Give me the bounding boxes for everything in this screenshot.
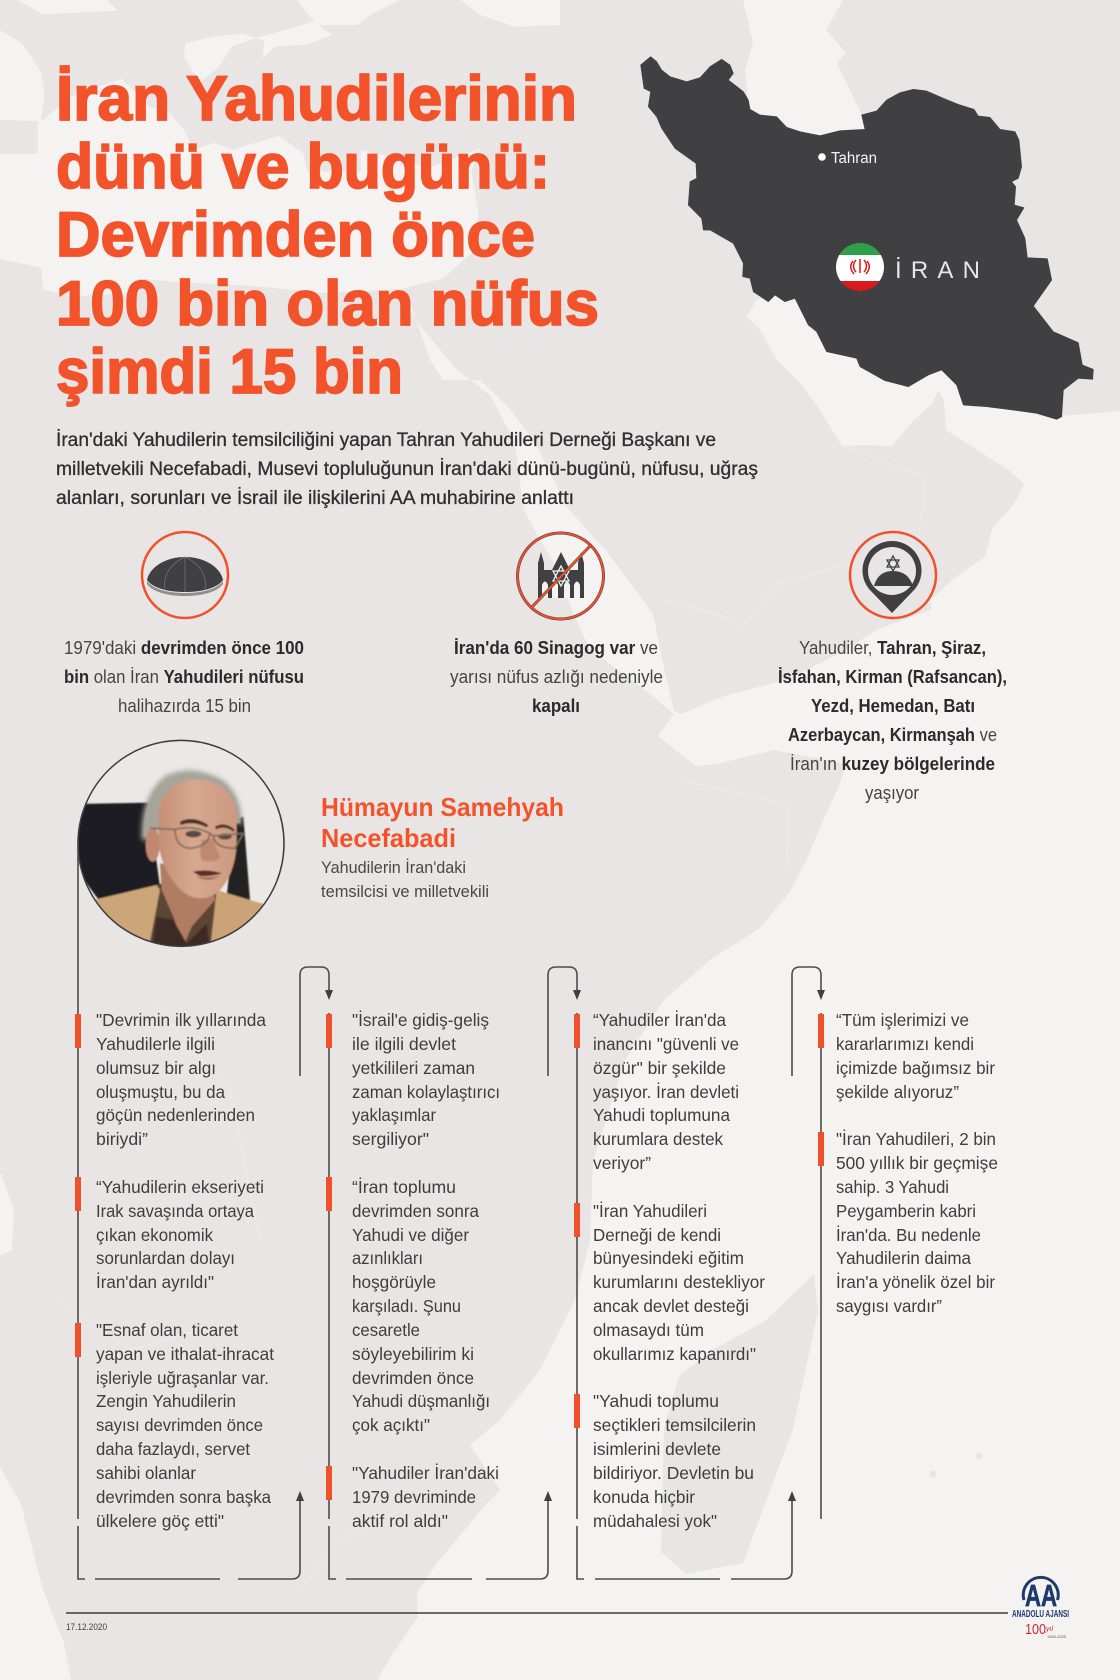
quote 5: azınlıkları [352,1248,423,1268]
quote 2 [75,1177,264,1292]
quote 11: saygısı vardır” [836,1296,942,1316]
quote 5: çok açıktı" [352,1415,430,1435]
title: Devrimden önce [56,200,535,270]
quote 6 [326,1463,499,1531]
stat text: kapalı [532,696,580,716]
stat text [778,638,1007,803]
quote 6: "Yahudiler İran'daki [352,1463,499,1483]
quote 9: isimlerini devlete [593,1439,721,1459]
quote 1: "Devrimin ilk yıllarında [96,1010,266,1030]
quote 1: oluşmuştu, bu da [96,1082,225,1102]
quote 3 [75,1320,274,1531]
panel: cities stat [778,532,1007,803]
quote 10 [818,1010,995,1102]
quote 3: Zengin Yahudilerin [96,1391,236,1411]
quote 9: konuda hiçbir [593,1487,695,1507]
quote 4: "İsrail'e gidiş-geliş [352,1010,489,1030]
quote 4 [326,1010,500,1149]
quote 11: "İran Yahudileri, 2 bin [836,1129,996,1149]
quote 10: “Tüm işlerimizi ve [836,1010,969,1030]
portrait [77,740,287,950]
quote 9: müdahalesi yok" [593,1511,717,1531]
quote column 2 [326,1010,500,1531]
quote 8 [574,1201,765,1364]
icon: kippah [142,532,228,618]
quote 9: bildiriyor. Devletin bu [593,1463,754,1483]
stat text: Yezd, Hemedan, Batı [811,696,975,716]
panel: synagogue stat [450,533,663,716]
quote 2: İran'dan ayrıldı" [96,1272,214,1292]
quote 3: "Esnaf olan, ticaret [96,1320,238,1340]
quote 7: yaşıyor. İran devleti [593,1082,739,1102]
Anadolu Agency logo: 1920-2020 [1047,1634,1067,1639]
stat text [64,638,304,716]
country label: İRAN [895,257,980,284]
quote 9: "Yahudi toplumu [593,1391,719,1411]
title: dünü ve bugünü: [56,132,550,202]
quote 5: Yahudi ve diğer [352,1225,469,1245]
quote 8: "İran Yahudileri [593,1201,707,1221]
quote 5: Yahudi düşmanlığı [352,1391,490,1411]
stat text: 1979'daki devrimden önce 100 [64,638,304,658]
intro text: milletvekili Necefabadi, Musevi topluluğunun İran'daki dünü-bugünü, nüfusu, uğraş [56,459,758,480]
intro text [56,430,758,509]
quote 3: sahibi olanlar [96,1463,196,1483]
quote 5: devrimden sonra [352,1201,479,1221]
quote 9 [574,1391,756,1531]
quote 2: Irak savaşında ortaya [96,1201,254,1221]
quote column 1 [75,1010,274,1531]
quote 10: içimizde bağımsız bir [836,1058,995,1078]
quote 7: kurumlara destek [593,1129,723,1149]
quote 3: ülkelere göç etti" [96,1511,224,1531]
quote 11: 500 yıllık bir geçmişe [836,1153,998,1173]
quote 8: olmasaydı tüm [593,1320,704,1340]
quote 7: özgür" bir şekilde [593,1058,726,1078]
quote 5: “İran toplumu [352,1177,456,1197]
quote 1: biriydi” [96,1129,148,1149]
speaker name [321,792,564,901]
quote 7: veriyor” [593,1153,651,1173]
map of Iran [641,57,1093,419]
quote 7: Yahudi toplumuna [593,1105,730,1125]
speaker role: temsilcisi ve milletvekili [321,882,489,901]
connector lines and arrows [78,843,825,1579]
stat text: İran'ın kuzey bölgelerinde [790,754,995,774]
quote 11: İran'a yönelik özel bir [836,1272,995,1292]
Anadolu Agency logo: AA [1025,1578,1057,1613]
quote 3: devrimden sonra başka [96,1487,271,1507]
quote 11 [818,1129,998,1316]
quote 5: söyleyebilirim ki [352,1344,474,1364]
quote column 4 [818,1010,998,1316]
stat text: halihazırda 15 bin [118,696,251,716]
quote 4: yetkilileri zaman [352,1058,475,1078]
quote 1 [75,1010,266,1149]
stat text [450,638,663,716]
intro text: alanları, sorunları ve İsrail ile ilişkilerini AA muhabirine anlattı [56,488,574,509]
quote 8: Derneği de kendi [593,1225,721,1245]
stat text: Yahudiler, Tahran, Şiraz, [799,638,986,658]
speaker name: Hümayun Samehyah [321,792,564,822]
quote 8: okullarımız kapanırdı" [593,1344,756,1364]
Anadolu Agency logo [1012,1577,1069,1639]
quote 5: devrimden önce [352,1368,474,1388]
quote 7 [574,1010,739,1173]
stat text: İran'da 60 Sinagog var ve [454,638,658,658]
quote column 3 [574,1010,765,1531]
footer rule and date: 17.12.2020 [66,1622,107,1633]
quote 5: hoşgörüyle [352,1272,436,1292]
panel: population stat [64,532,304,716]
quote 5 [326,1177,490,1435]
quote 3: işleriyle uğraşanlar var. [96,1368,269,1388]
quote 3: sayısı devrimden önce [96,1415,263,1435]
icon: Iranian flag [836,243,884,291]
quote 2: “Yahudilerin ekseriyeti [96,1177,264,1197]
quote 7: inancını "güvenli ve [593,1034,739,1054]
quote 3: daha fazlaydı, servet [96,1439,250,1459]
quote 4: ile ilgili devlet [352,1034,456,1054]
quote 5: cesaretle [352,1320,420,1340]
quote 3: yapan ve ithalat-ihracat [96,1344,274,1364]
icon: crossed synagogue [518,533,604,619]
quote 11: Peygamberin kabri [836,1201,976,1221]
title: İran Yahudilerinin [56,64,577,134]
stat text: bin olan İran Yahudileri nüfusu [64,667,304,687]
intro text: İran'daki Yahudilerin temsilciliğini yapan Tahran Yahudileri Derneği Başkanı ve [56,430,716,451]
stat text: Azerbaycan, Kirmanşah ve [788,725,997,745]
quote 5: karşıladı. Şunu [352,1296,461,1316]
quote 10: kararlarımızı kendi [836,1034,974,1054]
quote 1: Yahudilerle ilgili [96,1034,215,1054]
quote 7: “Yahudiler İran'da [593,1010,726,1030]
quote 11: sahip. 3 Yahudi [836,1177,949,1197]
icon: location pin [850,532,936,618]
quote 8: bünyesindeki eğitim [593,1248,744,1268]
Anadolu Agency logo: 100 [1025,1621,1046,1638]
Anadolu Agency logo: yıl [1045,1626,1053,1633]
quote 4: zaman kolaylaştırıcı [352,1082,500,1102]
quote 1: olumsuz bir algı [96,1058,216,1078]
Tehran marker: Tahran [831,150,877,167]
quote 9: seçtikleri temsilcilerin [593,1415,756,1435]
quote 1: göçün nedenlerinden [96,1105,255,1125]
stat text: yaşıyor [865,783,919,803]
quote 4: sergiliyor" [352,1129,429,1149]
quote 8: ancak devlet desteği [593,1296,749,1316]
title: 100 bin olan nüfus [56,269,599,339]
title [56,64,599,407]
Anadolu Agency logo: ANADOLU AJANSI [1012,1609,1069,1620]
quote 10: şekilde alıyoruz” [836,1082,959,1102]
quote 4: yaklaşımlar [352,1105,436,1125]
title: şimdi 15 bin [56,337,403,407]
stat text: İsfahan, Kirman (Rafsancan), [778,667,1007,687]
quote 2: çıkan ekonomik [96,1225,213,1245]
quote 6: 1979 devriminde [352,1487,476,1507]
quote 2: sorunlardan dolayı [96,1248,235,1268]
quote 11: Yahudilerin daima [836,1248,971,1268]
speaker role: Yahudilerin İran'daki [321,858,466,877]
quote 6: aktif rol aldı" [352,1511,448,1531]
speaker role [321,858,489,901]
quote 11: İran'da. Bu nedenle [836,1225,981,1245]
speaker name: Necefabadi [321,823,456,853]
quote 8: kurumlarını destekliyor [593,1272,765,1292]
stat text: yarısı nüfus azlığı nedeniyle [450,667,663,687]
